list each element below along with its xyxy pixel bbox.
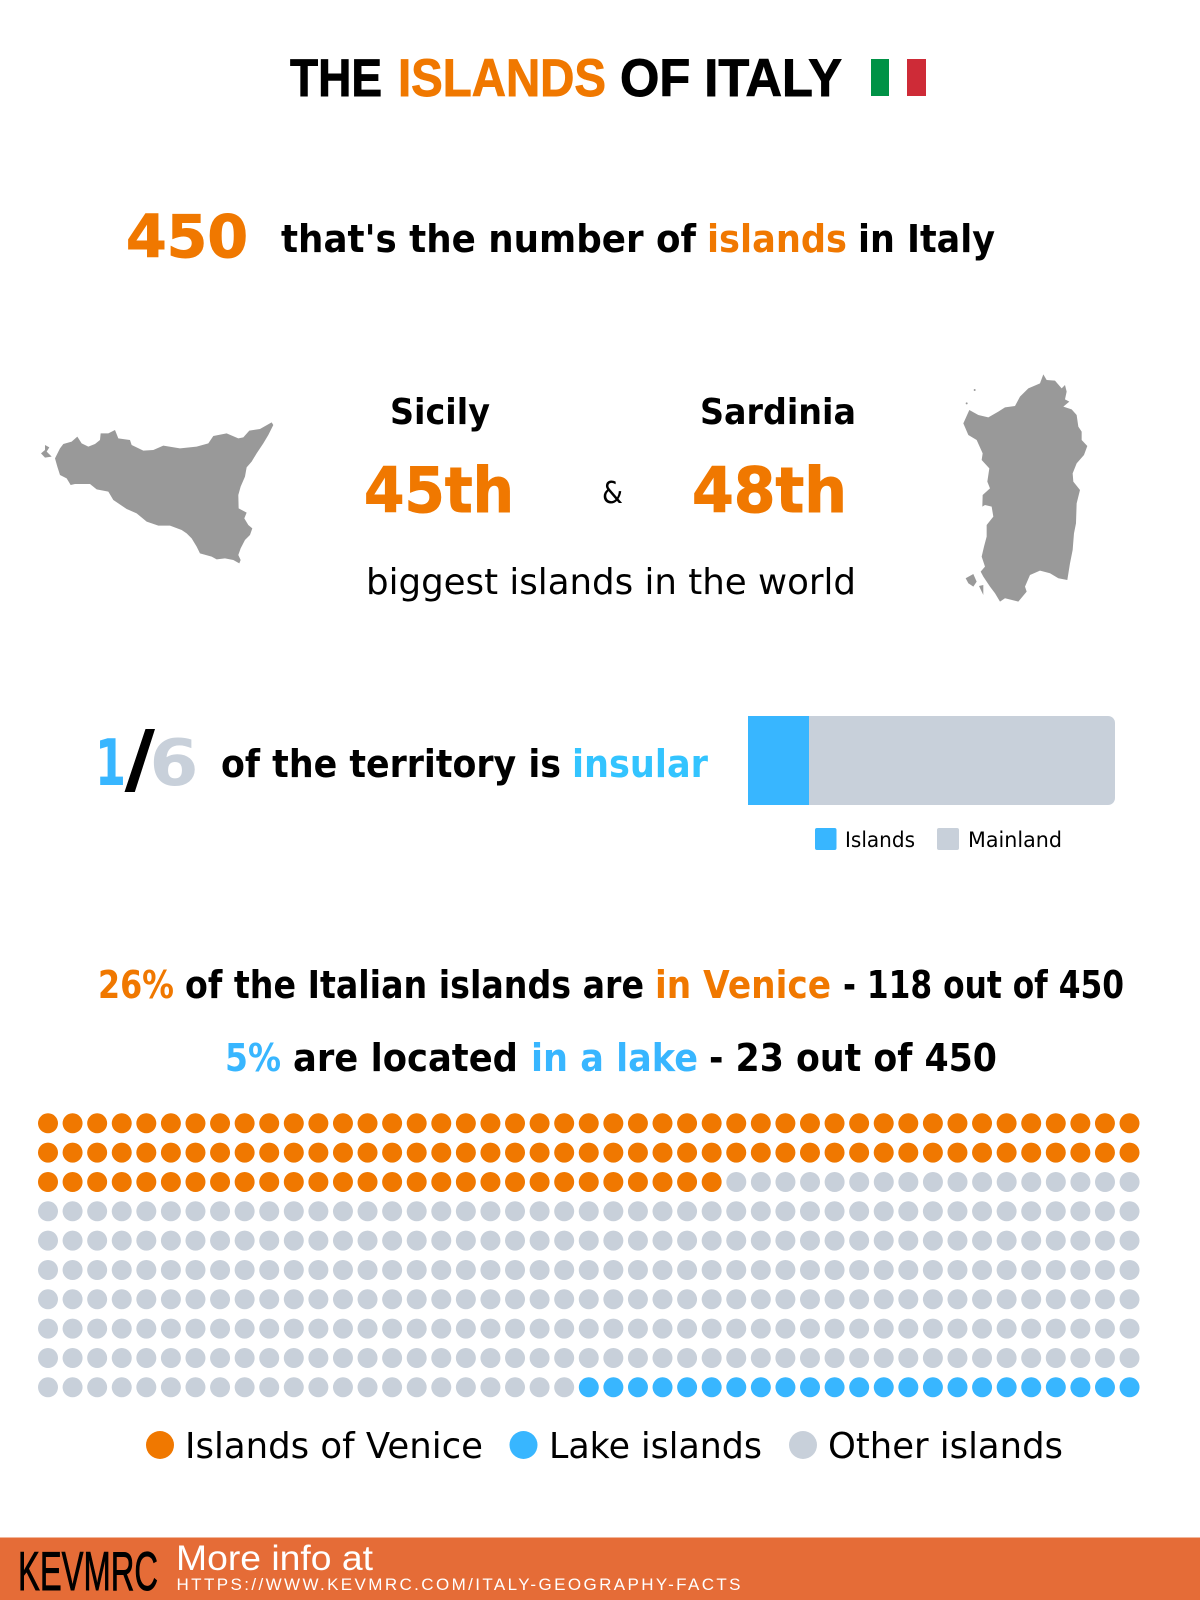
- title text: islands: ISLANDS: [398, 49, 606, 108]
- text: in italy: in Italy: [858, 217, 995, 261]
- title: [290, 49, 926, 108]
- bar chart: islands vs mainland: [748, 716, 1115, 805]
- rank: 48th: 48th: [692, 454, 847, 527]
- dot chart legend: [146, 1426, 1063, 1467]
- text: number of islands: that's the number of: [281, 217, 696, 261]
- panel: biggest islands: [41, 374, 1087, 603]
- dot chart: 450 islands: [48, 1123, 1130, 1387]
- bar legend: Mainland: [968, 828, 1062, 852]
- stat line: lake: 5%: [225, 1036, 281, 1080]
- map: sardinia: [963, 374, 1087, 602]
- bar legend: [815, 828, 1062, 852]
- fraction 1/6: [95, 727, 198, 801]
- text: insular: insular: [572, 742, 708, 786]
- headline stat: 450 islands: [126, 202, 995, 271]
- stat line: lake: are located: [293, 1036, 518, 1080]
- text: of the territory: of the territory is: [221, 742, 561, 786]
- title text: the: THE: [290, 49, 382, 108]
- label: sardinia: Sardinia: [700, 392, 856, 433]
- stat line: lake: [225, 1036, 997, 1080]
- panel: territory share: [95, 716, 1115, 852]
- text: islands highlight: islands: [707, 217, 847, 261]
- dot chart legend: Lake islands: [549, 1426, 762, 1467]
- footer text: more info: More info at: [176, 1539, 373, 1578]
- stat line: venice: of the Italian islands are: [185, 963, 644, 1007]
- stat line: venice: - 118 out of 450: [843, 963, 1124, 1007]
- label: sicily: Sicily: [390, 392, 490, 433]
- bar legend: Islands: [845, 828, 915, 852]
- stat line: venice: 26%: [98, 963, 174, 1007]
- number 450: 450: [126, 202, 248, 271]
- icon: italian flag: [871, 59, 926, 96]
- stat line: venice: in Venice: [655, 963, 831, 1007]
- fraction 1/6: 6: [150, 727, 198, 801]
- fraction 1/6: 1: [95, 727, 126, 801]
- stat line: venice: [98, 963, 1124, 1007]
- caption: biggest islands: biggest islands in the world: [366, 562, 856, 603]
- dot chart legend: Islands of Venice: [185, 1426, 483, 1467]
- ampersand: &: [602, 476, 623, 511]
- footer text: url: HTTPS://WWW.KEVMRC.COM/ITALY-GEOGRAPHY-FACTS: [176, 1575, 741, 1594]
- footer: [0, 1538, 1200, 1600]
- stat line: lake: - 23 out of 450: [709, 1036, 997, 1080]
- rank: 45th: 45th: [364, 454, 514, 527]
- title text: of italy: OF ITALY: [620, 49, 842, 108]
- stat line: lake: in a lake: [531, 1036, 698, 1080]
- dot chart legend: Other islands: [828, 1426, 1063, 1467]
- map: sicily: [41, 422, 273, 563]
